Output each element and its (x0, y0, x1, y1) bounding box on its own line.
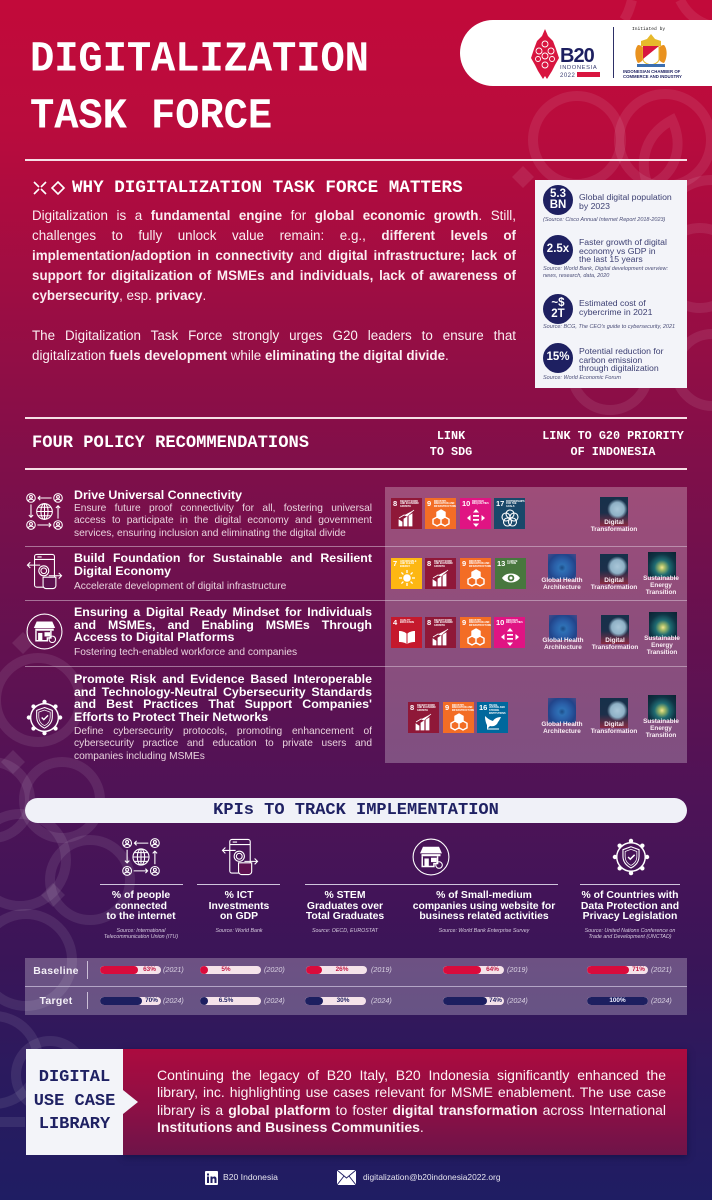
section heading: why it matters (34, 178, 463, 198)
KPI source (570, 928, 690, 941)
label (632, 635, 692, 657)
SDG 10: 10 (462, 499, 470, 508)
SDG 9: INDUSTRY, INNOVATION AND INFRASTRUCTURE (469, 560, 491, 568)
recommendation 4 description: cybersecurity practice and education to private users and (74, 738, 372, 749)
KPI title: ICT investments: on GDP (220, 911, 258, 922)
KPI title: small-medium companies: companies using website for (413, 901, 555, 912)
recommendation 1 description (74, 503, 372, 539)
use case library label: DIGITAL (39, 1068, 110, 1087)
recommendation 1 description: Ensure future proof connectivity for all, fostering universal (74, 503, 372, 514)
logo panel (460, 20, 712, 86)
priority row 4: global health (532, 698, 592, 735)
SDG 13: 13 (497, 559, 505, 568)
chamber name (623, 69, 682, 79)
KPI title: data protection: % of Countries with (582, 890, 678, 901)
KPI title: small-medium companies: % of Small-medium (436, 890, 532, 901)
recommendation 3 description: Fostering tech-enabled workforce and companies (74, 647, 297, 658)
title line two: TASK FORCE (30, 93, 272, 141)
SDG 9: INDUSTRY, INNOVATION AND INFRASTRUCTURE (452, 704, 474, 712)
recommendation 1 description: services, ensuring inclusion and eliminating the digital divide (74, 528, 346, 539)
KPI source: Source: World Bank (215, 928, 263, 934)
KPI title: ICT investments (189, 891, 289, 923)
icon: connectivity (26, 493, 63, 530)
baseline bar: data protection: 71% (632, 966, 645, 973)
KPI title: STEM graduates: % STEM (324, 890, 366, 901)
target bar: data protection: 100% (609, 997, 626, 1004)
label: Digital (604, 721, 624, 728)
KPI title: people connected: % of people (112, 890, 170, 901)
SDG 8 (425, 617, 456, 648)
label: Transformation (591, 584, 637, 591)
label: target: Target (39, 995, 73, 1007)
SDG 9: 9 (462, 618, 466, 627)
stat text faster growth (579, 237, 667, 264)
text: why paragraph one: support for digitalization of MSMEs and individuals, lack of awareness of (32, 268, 516, 283)
stat text cybercrime: Estimated cost of (579, 298, 646, 308)
KPI source: Source: International (117, 928, 165, 934)
target year: (2024) (507, 996, 528, 1005)
SDG 8: 8 (427, 559, 431, 568)
target bar: companies: 74% (489, 997, 502, 1004)
SDG 10 (494, 617, 525, 648)
SDG 17: 17 (496, 499, 504, 508)
baseline bar: companies (443, 966, 504, 974)
stat badge 15%: 15% (546, 351, 570, 363)
recommendation 2 title: Build Foundation for Sustainable and Resilient (74, 551, 372, 565)
SDG 4: 4 (393, 618, 397, 627)
target year: (2024) (651, 996, 672, 1005)
label: Digital (604, 519, 624, 526)
baseline bar: ICT (200, 966, 261, 974)
SDG 8: 8 (410, 703, 414, 712)
label: Global Health (541, 721, 583, 728)
recommendation 2 title: Digital Economy (74, 564, 171, 578)
priority row 1: digital transformation (590, 497, 637, 533)
label: Energy (651, 642, 673, 649)
baseline bar: people connected (100, 966, 161, 974)
recommendation 4 title: Promote Risk and Evidence Based Interoperable (74, 672, 372, 686)
use case library label: LIBRARY (39, 1115, 110, 1134)
KPI title: STEM graduates: Graduates over (307, 901, 383, 912)
use case library label (26, 1066, 123, 1136)
recommendation 3 title: and MSMEs, and Enabling MSMEs Through (74, 618, 372, 632)
SDG 10: REDUCED INEQUALITIES (472, 500, 489, 505)
label: Energy (650, 582, 672, 589)
KPI icon: security (612, 838, 650, 876)
image: sustainable energy (648, 552, 676, 577)
target bar: ICT (200, 997, 261, 1005)
SDG 13 (495, 558, 526, 589)
label: Global Health (542, 637, 584, 644)
column heading: link to SDG (430, 429, 472, 459)
SDG 8: DECENT WORK AND ECONOMIC GROWTH (400, 500, 419, 508)
stat source: news, research, data, 2020 (543, 273, 609, 279)
column heading: link to G20 priority: LINK TO G20 PRIORITY (542, 429, 684, 443)
stat badge 2T (543, 294, 573, 324)
column heading: link to G20 priority: OF INDONESIA (571, 445, 655, 459)
icon: email (337, 1170, 356, 1185)
stat text global population: by 2023 (579, 201, 610, 211)
priority row 4: digital transformation (584, 698, 644, 735)
stat text global population: Global digital population (579, 192, 672, 202)
label: baseline: Baseline (33, 965, 79, 977)
recommendation 3 title: Ensuring a Digital Ready Mindset for Individuals (74, 605, 372, 619)
stat source: (Source: Cisco Annual Internet Report 2018-2023) (543, 217, 665, 223)
SDG 10: REDUCED INEQUALITIES (506, 618, 523, 624)
label: Transformation (592, 644, 638, 651)
column heading: link to SDG: TO SDG (430, 445, 472, 459)
label: Architecture (543, 728, 581, 735)
library description: Institutions and Business Communities. (157, 1119, 424, 1135)
B20 ornament logo (531, 29, 559, 79)
recommendation 1 title: Drive Universal Connectivity (74, 488, 242, 502)
recommendation 1 description: access to participate in the digital economy and government (74, 515, 372, 526)
SDG tiles row 3 (391, 617, 525, 648)
image: digital transformation (600, 554, 628, 584)
label: Sustainable (643, 575, 679, 582)
baseline bar: ICT: 5% (221, 966, 231, 973)
image: global health (548, 615, 576, 640)
stat source: Source: BCG, The CEO's guide to cybersecurity, 2021 (543, 324, 675, 330)
KPI title: people connected (91, 891, 191, 923)
SDG 8: DECENT WORK AND ECONOMIC GROWTH (434, 618, 453, 627)
heading text: WHY DIGITALIZATION TASK FORCE MATTERS (72, 178, 463, 198)
KPI title: STEM graduates (295, 891, 395, 923)
stat text cybercrime: cybercrime in 2021 (579, 307, 652, 317)
stat badge 2.5x (543, 235, 573, 265)
B20 wordmark: B20 (560, 45, 594, 67)
target year: (2024) (264, 996, 285, 1005)
priority row 2: sustainable energy (643, 552, 679, 596)
stat badge 5.3 BN: BN (550, 199, 566, 211)
chamber crest (635, 34, 667, 67)
recommendation 4 title: and Technology-Neutral Cybersecurity Standards (74, 684, 372, 698)
stat text faster growth: Faster growth of digital (579, 237, 667, 247)
KPI title: data protection: Data Protection and (581, 901, 679, 912)
target bar: ICT: 6.5% (219, 997, 233, 1004)
label (590, 519, 637, 533)
priority row 3: global health (542, 615, 584, 651)
year tag: 2022 (560, 73, 575, 79)
SDG 16: 16 (479, 703, 487, 712)
label (592, 637, 638, 651)
chamber name: COMMERCE AND INDUSTRY (623, 74, 682, 79)
baseline bar: companies: 64% (486, 966, 499, 973)
icon: shop (26, 614, 62, 650)
image: global health (548, 554, 576, 579)
label (590, 577, 637, 591)
stat badge 2T: 2T (551, 308, 565, 320)
column heading: link to G20 priority (542, 429, 684, 459)
baseline year: (2021) (651, 965, 672, 974)
stat badge 2.5x: 2.5x (547, 243, 569, 255)
SDG 9: INDUSTRY, INNOVATION AND INFRASTRUCTURE (469, 618, 491, 627)
KPI title: data protection (570, 891, 690, 923)
SDG 9 (460, 617, 491, 648)
recommendation 2 title (74, 551, 372, 578)
SDG 9: 9 (462, 559, 466, 568)
SDG tiles row 1 (391, 498, 525, 529)
SDG 7 (391, 558, 422, 589)
SDG 9: 9 (445, 703, 449, 712)
KPI icon: connectivity (122, 838, 160, 876)
KPI source: Telecommunication Union (ITU) (104, 934, 178, 940)
SDG 9: INDUSTRY, INNOVATION AND INFRASTRUCTURE (434, 500, 456, 508)
SDG 13: CLIMATE ACTION (507, 560, 517, 565)
target year: (2024) (163, 996, 184, 1005)
label (541, 577, 583, 591)
text: LinkedIn handle: B20 Indonesia (223, 1172, 278, 1182)
chamber name: INDONESIAN CHAMBER OF (623, 69, 680, 74)
stat text cybercrime (579, 298, 652, 317)
priority row 2: global health (541, 554, 583, 591)
label: Global Health (541, 577, 583, 584)
SDG 9 (460, 558, 491, 589)
text: why paragraph one: challenges to fully unlock value remain: e.g., different levels of (32, 228, 516, 243)
label: Architecture (544, 644, 582, 651)
SDG 10: 10 (496, 618, 504, 627)
label: Energy (650, 725, 672, 732)
target bar: people connected (100, 997, 161, 1005)
recommendation 3 title: Access to Digital Platforms (74, 630, 234, 644)
target bar: STEM (305, 997, 366, 1005)
target bar: data protection (587, 997, 648, 1005)
label: Architecture (543, 584, 581, 591)
target bar: STEM: 30% (337, 997, 349, 1004)
KPI source (91, 928, 191, 941)
stat source (543, 266, 668, 279)
SDG 9 (443, 702, 474, 733)
recommendation 4 description: Define cybersecurity protocols, promoting enhancement of (74, 726, 372, 737)
KPI source: Source: OECD, EUROSTAT (312, 928, 378, 934)
panel: KPI table (25, 958, 687, 1015)
SDG 8: DECENT WORK AND ECONOMIC GROWTH (434, 560, 453, 568)
label (584, 721, 644, 735)
SDG 7: 7 (393, 559, 397, 568)
priority row 2: digital transformation (590, 554, 637, 591)
recommendation 4 description: companies including MSMEs (74, 751, 205, 762)
KPI title: ICT investments: Investments (209, 901, 269, 912)
SDG 16: PEACE, JUSTICE AND STRONG INSTITUTIONS (489, 704, 506, 715)
stat badge 2T: ~$ (551, 296, 565, 308)
image: sustainable energy (649, 612, 677, 637)
library description (157, 1067, 666, 1136)
KPI title: people connected: to the internet (106, 911, 176, 922)
text: why paragraph two: digitalization fuels development while eliminating the digital divide. (32, 348, 449, 362)
year tag (560, 72, 600, 79)
KPI title: small-medium companies: business related activities (419, 911, 549, 922)
stat text carbon: carbon emission (579, 355, 642, 365)
title: DIGITALIZATION (30, 36, 369, 84)
recommendation 4 description (74, 726, 372, 762)
text: why paragraph one: Digitalization is a fundamental engine for global economic growth. Still, (32, 208, 516, 223)
text: email address: digitalization@b20indonesia2022.org (363, 1172, 500, 1182)
library description: Continuing the legacy of B20 Italy, B20 Indonesia significantly enhanced the (157, 1067, 666, 1083)
text: why paragraph two: The Digitalization Task Force strongly urges G20 leaders to ensure that (32, 328, 516, 343)
label (542, 637, 584, 651)
target year: (2024) (371, 996, 392, 1005)
SDG 9 (425, 498, 456, 529)
Indonesia wordmark: INDONESIA (560, 65, 597, 71)
priority row 3: sustainable energy (632, 612, 692, 657)
divider (613, 27, 614, 78)
target bar: companies (443, 997, 504, 1005)
SDG 4: QUALITY EDUCATION (400, 618, 414, 624)
stat text carbon (579, 346, 664, 373)
library description: library, inc. highlighting use cases relevant for MSME enablement. The use case (157, 1084, 666, 1100)
stat text carbon: through digitalization (579, 363, 659, 373)
baseline bar: data protection (587, 966, 648, 974)
baseline year: (2020) (264, 965, 285, 974)
column heading: link to SDG: LINK (437, 429, 465, 443)
KPI title: STEM graduates: Total Graduates (306, 911, 384, 922)
KPI icon: tablet (221, 838, 259, 876)
KPI title: data protection: Privacy Legislation (583, 911, 677, 922)
SDG 17 (494, 498, 525, 529)
target bar: people connected: 70% (145, 997, 158, 1004)
icon: sparkle marks (34, 181, 65, 195)
stat badge 15% (543, 343, 573, 373)
text: why paragraph one: implementation/adoption in connectivity and digital infrastructure; lack of (32, 248, 516, 263)
SDG 8: 8 (427, 618, 431, 627)
KPI source: Source: United Nations Conference on (585, 928, 675, 934)
label (532, 721, 592, 735)
KPI source: Source: World Bank Enterprise Survey (439, 928, 529, 934)
baseline bar: STEM (306, 966, 367, 974)
panel: use case library text (123, 1049, 687, 1155)
SDG 8 (391, 498, 422, 529)
panel: key statistics (535, 180, 687, 388)
KPI heading pill (25, 798, 687, 823)
stat badge 5.3 BN: 5.3 (550, 188, 566, 200)
text: why paragraph two (32, 328, 516, 363)
label: Sustainable (643, 718, 679, 725)
label (643, 575, 679, 596)
image: global health (548, 698, 576, 723)
text: why paragraph one (32, 208, 516, 303)
SDG 8: DECENT WORK AND ECONOMIC GROWTH (417, 704, 436, 712)
SDG tiles row 4 (408, 702, 508, 733)
SDG 9: 9 (427, 499, 431, 508)
SDG 8 (408, 702, 439, 733)
stat text faster growth: the last 15 years (579, 254, 643, 264)
SDG 16 (477, 702, 508, 733)
use case library label: USE CASE (34, 1092, 115, 1110)
label: Transition (647, 649, 677, 656)
icon: security (26, 700, 62, 736)
baseline bar: STEM: 26% (336, 966, 348, 973)
text: why paragraph one: cybersecurity, esp. privacy. (32, 288, 206, 303)
label: Digital (604, 577, 624, 584)
stat text carbon: Potential reduction for (579, 346, 664, 356)
SDG 8: 8 (393, 499, 397, 508)
priority row 3: digital transformation (592, 615, 638, 651)
SDG 17: PARTNERSHIPS FOR THE GOALS (506, 500, 525, 508)
KPI title: ICT investments: % ICT (225, 890, 253, 901)
KPI heading pill: KPIs TO TRACK IMPLEMENTATION (213, 801, 499, 820)
stat text global population (579, 192, 672, 211)
use case library label box with pointer (26, 1049, 139, 1155)
baseline bar: people connected: 63% (143, 966, 156, 973)
stat source: Source: World Economic Forum (543, 375, 621, 381)
stat source: Source: World Bank, Digital development overview: (543, 266, 668, 272)
library description: library is a global platform to foster digital transformation across International (157, 1102, 666, 1118)
recommendation 3 title (74, 605, 372, 644)
baseline year: (2019) (371, 965, 392, 974)
icon: digital tablet (26, 554, 62, 590)
recommendation 2 description: Accelerate development of digital infrastructure (74, 581, 286, 592)
recommendation 4 title (74, 672, 372, 724)
image: digital transformation (600, 698, 628, 728)
initiated by: Initiated by (632, 27, 665, 32)
label: Transition (646, 589, 676, 596)
stat text faster growth: economy vs GDP in (579, 246, 656, 256)
recommendation 4 title: and Best Practices That Support Companies' (74, 697, 372, 711)
image: digital transformation (601, 615, 629, 644)
SDG 4 (391, 617, 422, 648)
label: Transition (646, 732, 676, 739)
stat badge 5.3 BN (543, 185, 573, 215)
KPI title: people connected: connected (115, 901, 167, 912)
KPI icon: shop (412, 838, 450, 876)
icon: LinkedIn (205, 1171, 218, 1185)
recommendation 4 title: Efforts to Protect Their Networks (74, 710, 268, 724)
image: digital transformation (600, 497, 628, 526)
priority row 4: sustainable energy (631, 695, 691, 740)
baseline year: (2019) (507, 965, 528, 974)
KPI title: small-medium companies (404, 891, 564, 923)
SDG 10 (460, 498, 491, 529)
SDG 8 (425, 558, 456, 589)
SDG 7: AFFORDABLE AND CLEAN ENERGY (400, 560, 416, 568)
label: Transformation (591, 728, 637, 735)
label: Digital (605, 637, 625, 644)
label: Sustainable (644, 635, 680, 642)
panel: links background (385, 487, 687, 763)
KPI source: Trade and Development (UNCTAD) (588, 934, 672, 940)
SDG tiles row 2 (391, 558, 526, 589)
label: Transformation (591, 526, 637, 533)
heading: four policy recommendations: FOUR POLICY RECOMMENDATIONS (32, 434, 309, 453)
label (631, 718, 691, 740)
image: sustainable energy (648, 695, 676, 720)
baseline year: (2021) (163, 965, 184, 974)
